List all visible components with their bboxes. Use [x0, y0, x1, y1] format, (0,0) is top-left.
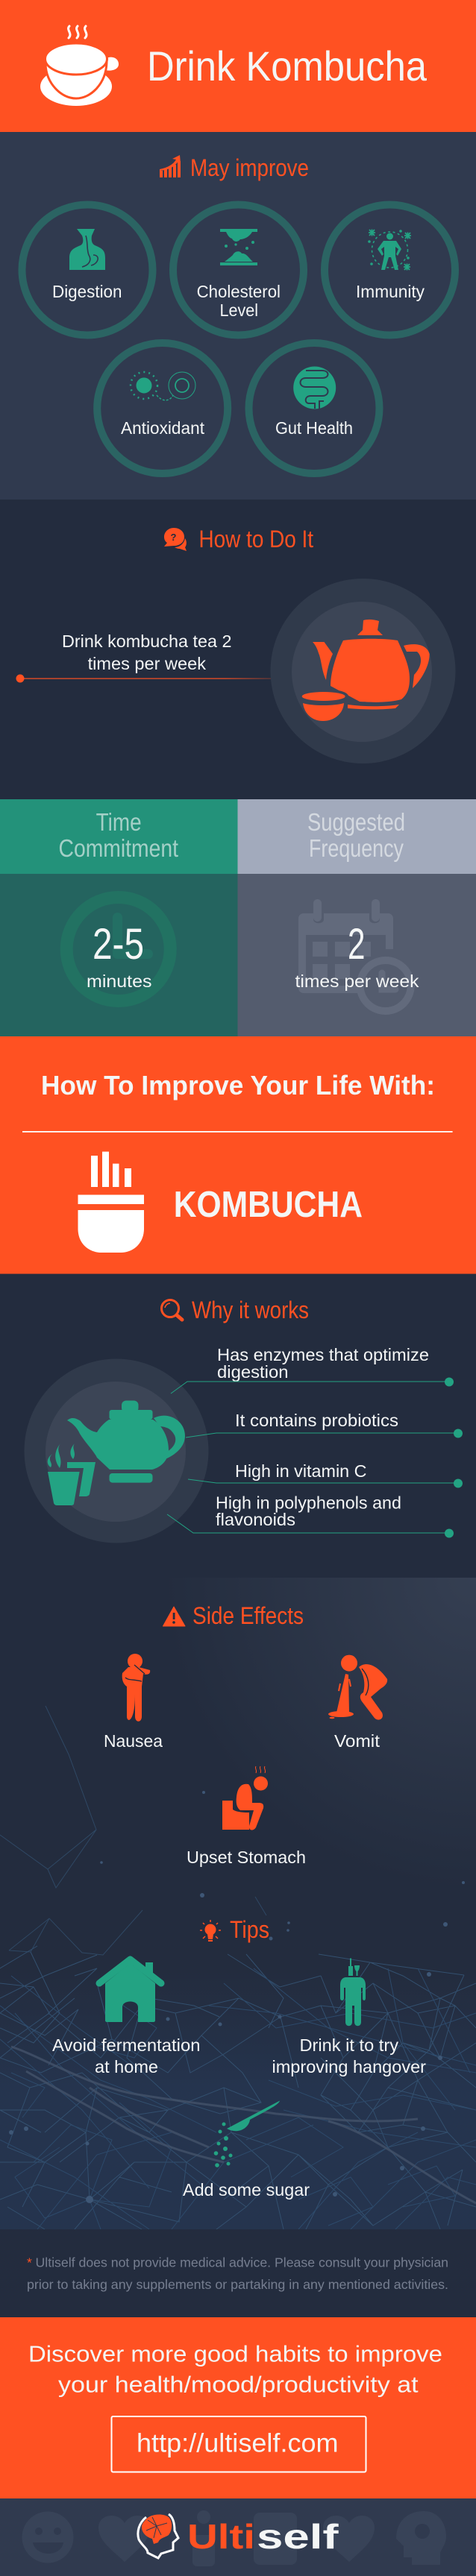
header banner	[0, 0, 476, 132]
url button: http://ultiself.com	[137, 2429, 339, 2458]
reason: probiotics	[186, 1411, 463, 1437]
panel: how to do it	[0, 500, 476, 799]
stat: time commitment	[0, 799, 237, 1036]
heading: kombucha: KOMBUCHA	[174, 1185, 363, 1225]
benefit: cholesterol level	[173, 204, 304, 336]
icon: spoon with sugar	[214, 2101, 280, 2167]
label: Add some sugar	[183, 2180, 310, 2199]
stat heading	[58, 808, 178, 862]
reason: enzymes: Has enzymes that optimize	[217, 1345, 429, 1364]
icon: person with bottle	[340, 1958, 366, 2026]
icon: clock watermark	[66, 898, 170, 1001]
footer watermark icons	[22, 2510, 446, 2566]
reason: enzymes	[171, 1345, 454, 1394]
icon: vomiting person	[328, 1655, 387, 1720]
stat heading: Time	[96, 808, 142, 836]
label: Upset Stomach	[187, 1848, 306, 1867]
reason: polyphenols: flavonoids	[216, 1510, 295, 1529]
label: Immunity	[356, 282, 425, 301]
disclaimer: *	[27, 2255, 32, 2270]
benefit: gut health	[249, 343, 379, 473]
heading: may improve: May improve	[190, 154, 309, 181]
value: 2 times per week	[295, 920, 419, 991]
icon: digestive tract	[69, 229, 105, 270]
benefit: immunity	[325, 204, 455, 336]
label: Drink it to try	[300, 2035, 399, 2055]
panel: side effects	[104, 1602, 387, 1867]
label: Nausea	[104, 1731, 163, 1751]
icon: teapot and cup	[270, 579, 455, 763]
reason: vitamin c: High in vitamin C	[235, 1461, 367, 1481]
icon: person on toilet	[222, 1766, 268, 1830]
benefit: cholesterol level: Level	[219, 300, 258, 320]
disclaimer: prior to taking any supplements or partaking in any mentioned activities.	[27, 2277, 448, 2292]
heading: side effects: Side Effects	[192, 1602, 304, 1629]
logo: wordmark: Ulti	[187, 2517, 255, 2556]
icon: growth chart	[160, 155, 181, 177]
label: Antioxidant	[121, 418, 205, 438]
icon: warning triangle	[163, 1607, 185, 1626]
title: Drink Kombucha	[147, 42, 428, 89]
cta text: your health/mood/productivity at	[58, 2371, 419, 2398]
label: Gut Health	[275, 418, 353, 438]
value: 2-5 minutes: 2-5	[93, 920, 144, 969]
background: network texture	[0, 1578, 476, 2229]
effect: upset stomach	[187, 1766, 306, 1867]
tip: drink to improve hangover	[272, 1958, 426, 2076]
reason: vitamin c	[188, 1461, 463, 1488]
footer logo bar	[0, 2498, 476, 2576]
reason: polyphenols: High in polyphenols and	[216, 1493, 401, 1512]
disclaimer: Ultiself does not provide medical advice. Please consult your physician	[36, 2255, 448, 2270]
panel: why it works	[0, 1273, 476, 1579]
value: 2-5 minutes: minutes	[87, 971, 152, 991]
label: Digestion	[52, 282, 122, 301]
effect: vomit	[328, 1655, 387, 1751]
icon: question bubbles	[164, 528, 187, 551]
icon: hourglass	[220, 229, 257, 265]
reason: polyphenols	[167, 1493, 454, 1537]
reason: enzymes: digestion	[217, 1362, 288, 1382]
panel: may improve	[0, 132, 476, 500]
icon: intestines	[293, 367, 336, 409]
icon: coffee cup	[40, 26, 119, 106]
instruction callout	[16, 632, 292, 683]
cta text: Discover more good habits to improve	[28, 2341, 442, 2367]
tip: add some sugar	[183, 2101, 310, 2199]
panel: tips	[52, 1916, 426, 2199]
label: Avoid fermentation	[52, 2035, 200, 2055]
icon: teapot and mugs	[24, 1358, 209, 1543]
value: 2 times per week: 2	[348, 920, 366, 969]
icon: magnifier	[161, 1300, 182, 1320]
tip: avoid fermentation: at home	[95, 2057, 158, 2076]
icon: protected person	[368, 230, 411, 270]
disclaimer	[0, 2229, 476, 2317]
cta text	[28, 2341, 442, 2398]
value: 2-5 minutes	[87, 920, 152, 991]
icon: atoms	[131, 372, 195, 400]
panel: how to improve banner	[0, 1036, 476, 1273]
logo: wordmark: self	[257, 2517, 339, 2556]
instruction callout: times per week	[88, 654, 207, 673]
icon: question bubbles: ?	[170, 532, 176, 543]
icon: calendar watermark	[298, 899, 411, 1011]
tip: avoid fermentation	[52, 1959, 200, 2076]
heading: why it works: Why it works	[192, 1297, 309, 1323]
stat: suggested frequency	[237, 799, 476, 1036]
effect: nausea	[104, 1654, 163, 1751]
benefit: digestion	[22, 204, 152, 336]
stat heading: Suggested	[307, 808, 405, 836]
icon: house	[99, 1959, 161, 2022]
heading: tips: Tips	[230, 1916, 269, 1943]
instruction callout: Drink kombucha tea 2	[62, 632, 231, 651]
icon: nauseous person	[122, 1654, 150, 1722]
tip: drink to improve hangover: improving hangover	[272, 2057, 426, 2076]
heading: How To Improve Your Life With:	[41, 1070, 435, 1100]
benefit: antioxidant	[97, 343, 228, 473]
logo: brain head	[138, 2514, 178, 2558]
call to action	[0, 2317, 476, 2498]
url button	[112, 2416, 366, 2472]
stat heading	[307, 808, 405, 862]
heading: how to do it: How to Do It	[198, 526, 313, 552]
icon: light bulb	[200, 1920, 221, 1941]
stat heading: Frequency	[309, 834, 404, 862]
label: Vomit	[334, 1731, 381, 1751]
value: 2 times per week: times per week	[295, 971, 419, 991]
label: Cholesterol	[197, 282, 281, 301]
stat heading: Commitment	[58, 834, 178, 862]
icon: bowl with steam	[78, 1152, 144, 1253]
logo: wordmark	[187, 2517, 339, 2556]
reason: probiotics: It contains probiotics	[235, 1411, 398, 1430]
